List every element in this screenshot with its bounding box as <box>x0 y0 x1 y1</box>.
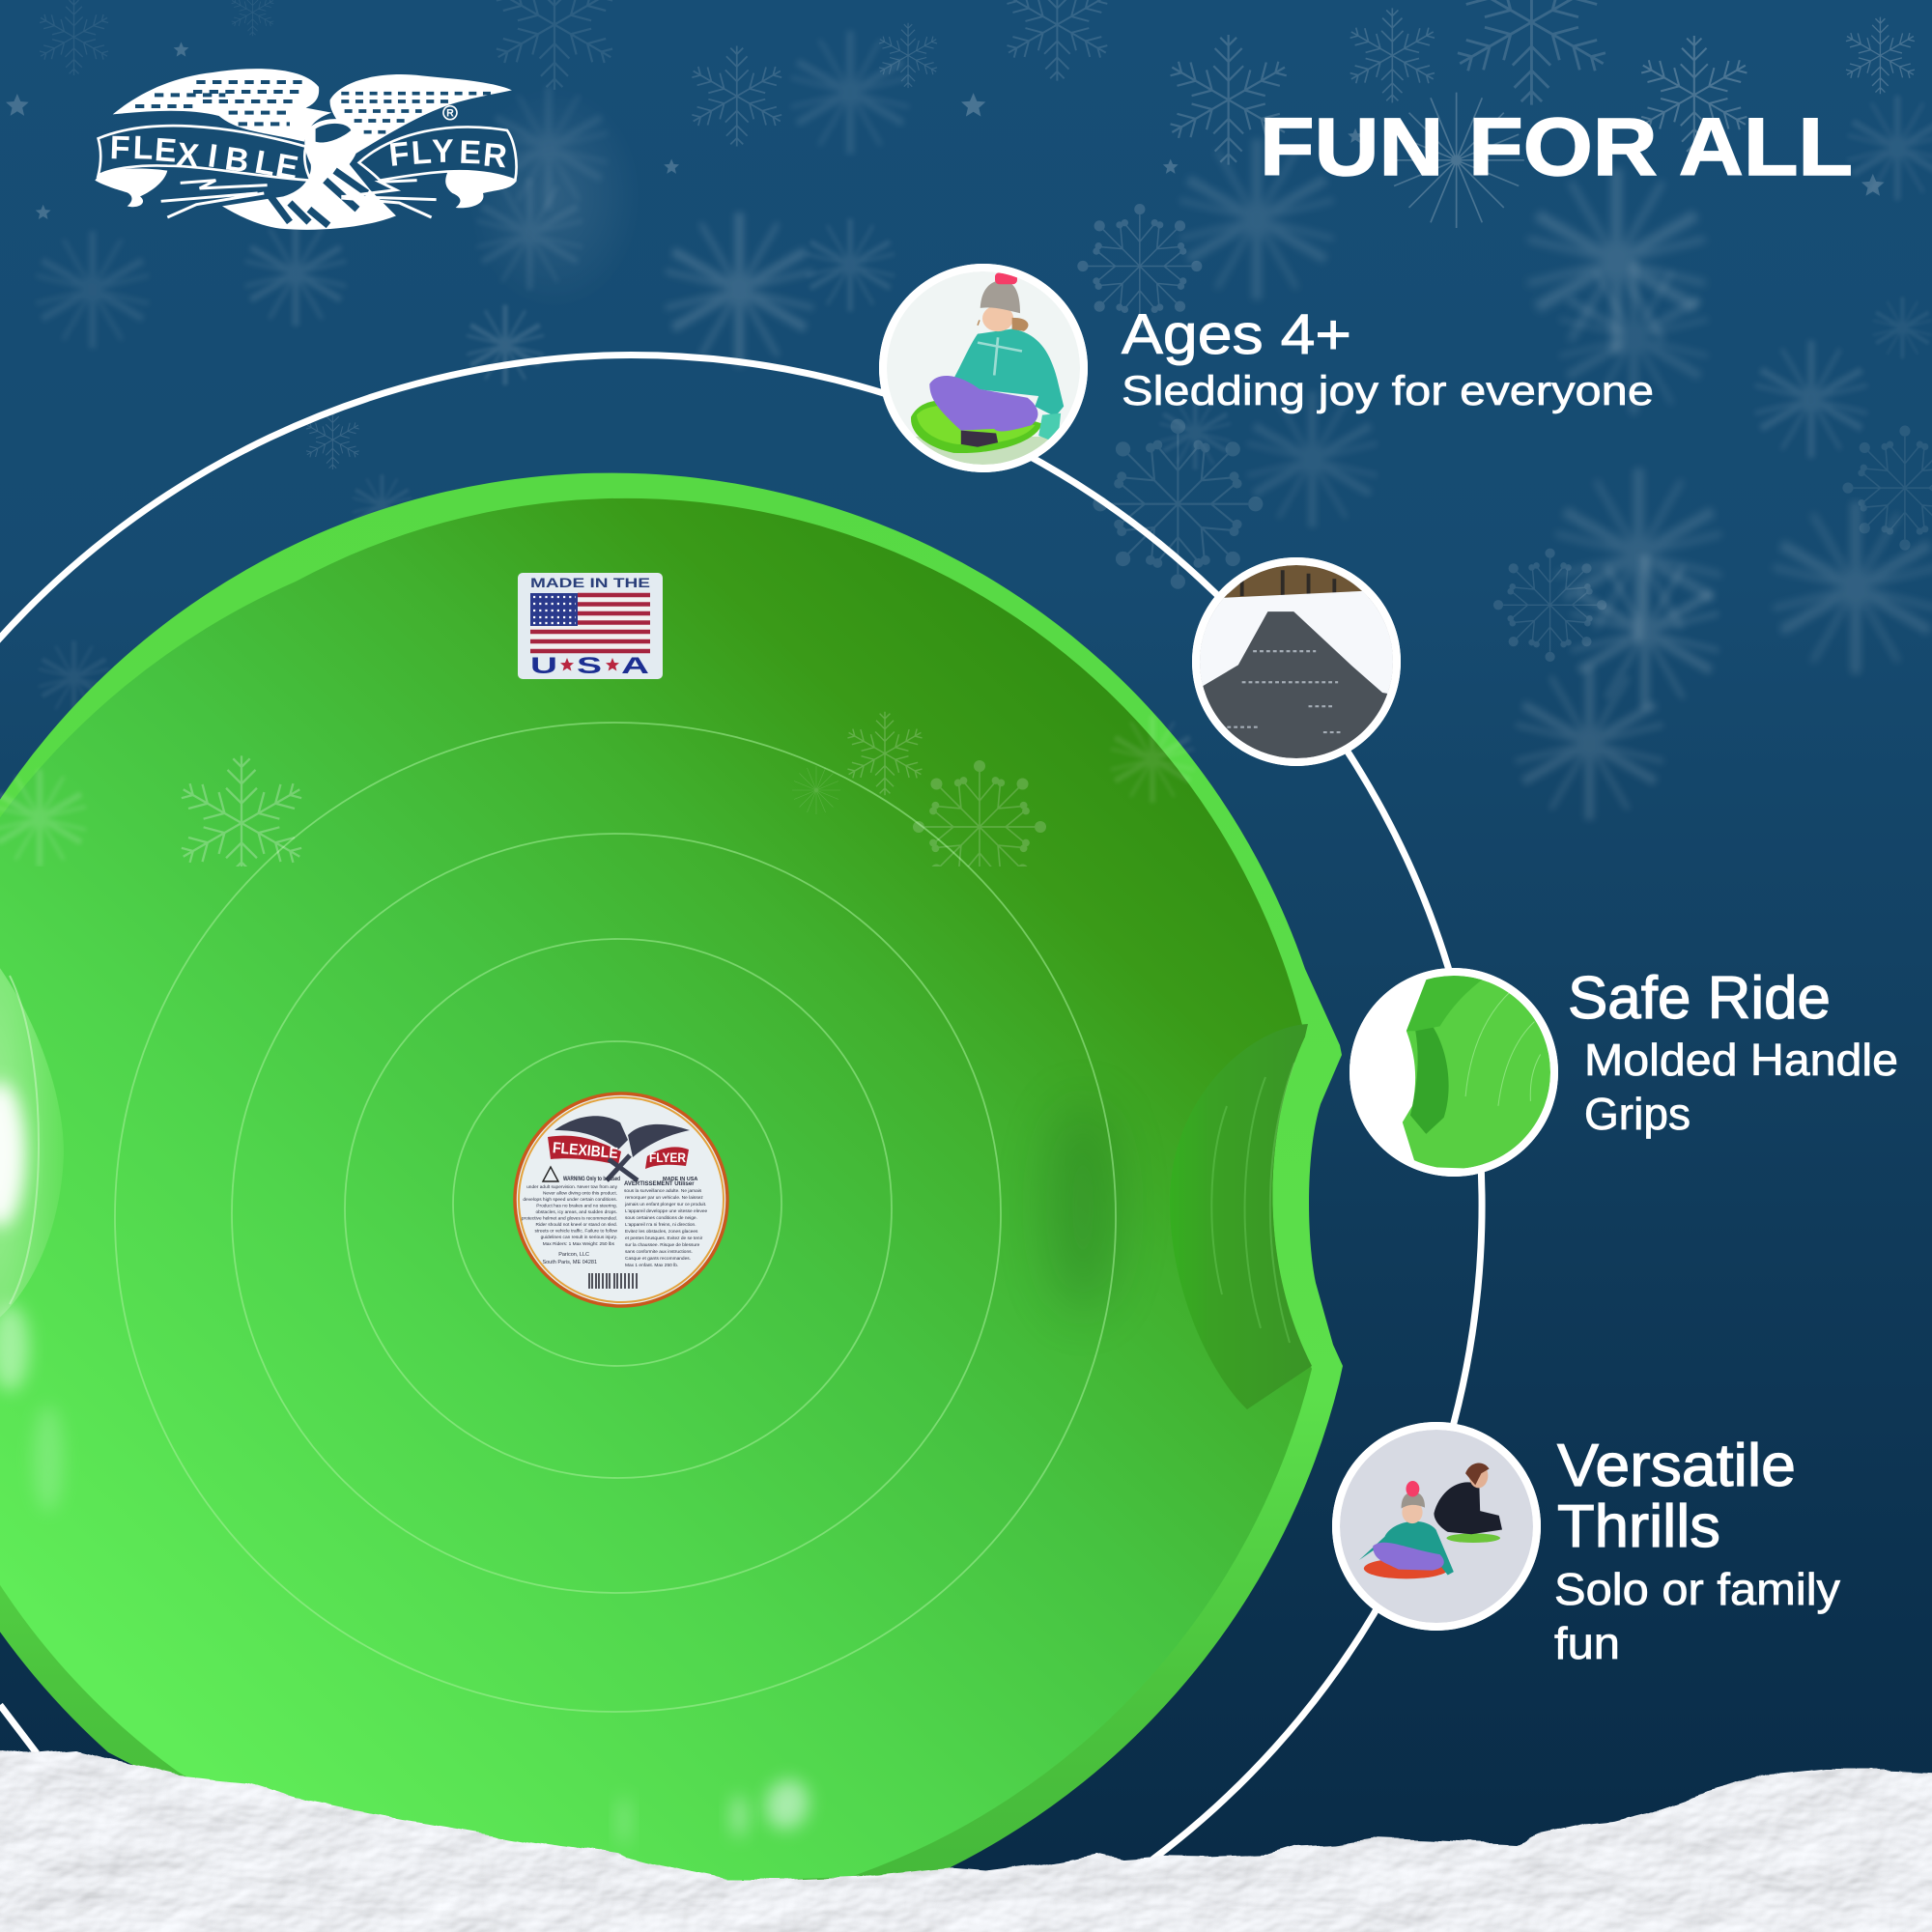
sticker USA letters: S <box>577 653 602 679</box>
label text French: L'appareil n'a ni freins, ni direction. <box>625 1222 696 1228</box>
right ribbon with FLYER: FLYER <box>387 133 508 175</box>
right handle grip recess <box>1170 1024 1312 1409</box>
label text French: sous la surveillance adulte. Ne jamais <box>624 1188 702 1194</box>
heading: FUN FOR ALL: FUN FOR ALL <box>1260 101 1853 192</box>
left ribbon with FLEXIBLE: FLEXIBLE <box>109 129 301 186</box>
label text English: South Paris, ME 04281 <box>542 1260 597 1265</box>
label text French: Casque et gants recommandes. <box>625 1256 691 1262</box>
sticker heading: MADE IN THE <box>530 575 650 590</box>
label text French: Max 1 enfant. Max 250 lb. <box>625 1263 678 1268</box>
concentric moulded rings <box>115 723 1116 1712</box>
label text French: et pentes brusques. Evitez de se tenir <box>625 1236 703 1241</box>
label text English: Never allow diving onto this product. <box>543 1190 617 1196</box>
label text English: Paricon, LLC <box>558 1252 589 1258</box>
label text French: MADE IN USA <box>663 1177 697 1182</box>
left handle cut-out <box>0 961 64 1321</box>
sled inner bowl <box>0 498 1312 1893</box>
label text French: remorquer par un vehicule. Ne laissez <box>625 1195 703 1201</box>
feature text: Versatile Thrills: Solo or family <box>1554 1564 1840 1614</box>
mini logo on label: FLYER <box>649 1150 686 1165</box>
snow drift foreground <box>0 1747 1932 1932</box>
side and bottom highlights <box>0 1304 814 1846</box>
right wing <box>330 74 512 155</box>
shadow near right handle <box>1046 1101 1120 1314</box>
face <box>982 305 1013 331</box>
snowflakes overlaid on sled <box>0 712 1194 894</box>
arrows and bolts <box>161 181 437 217</box>
feature text: Ages 4+ <box>1122 303 1654 414</box>
right ribbon with FLYER <box>359 128 517 208</box>
label text English: WARNING Only to be used <box>563 1177 620 1182</box>
sled outer rim <box>0 473 1343 1895</box>
feature text: Versatile Thrills: Thrills <box>1557 1493 1720 1560</box>
feature text: Safe Ride <box>1568 965 1898 1139</box>
feature text: Ages 4+: Sledding joy for everyone <box>1122 368 1654 414</box>
registered mark <box>443 106 457 120</box>
mini logo on label <box>548 1116 690 1180</box>
feature photo: girl on green sled <box>879 261 1092 475</box>
label text English: develops high speed under certain conditions. <box>523 1197 617 1203</box>
label text English: obstacles, icy areas, and sudden drops. <box>535 1209 617 1215</box>
feature text: Versatile Thrills: fun <box>1554 1618 1620 1668</box>
feature photo: girl and mother sledding <box>1332 1422 1541 1632</box>
background snowflakes <box>6 0 1932 820</box>
sticker USA letters <box>530 653 649 679</box>
feature text: Ages 4+: Ages 4+ <box>1122 303 1351 366</box>
label text French: sous certaines conditions de neige. <box>625 1215 697 1221</box>
green sled <box>911 400 1042 453</box>
label text French: jamais un enfant plonger sur ce produit. <box>624 1202 706 1208</box>
registered mark: R <box>446 108 454 120</box>
label text French <box>624 1177 708 1268</box>
outer white arc connecting feature circles <box>0 355 1482 1860</box>
child on orange sled <box>1364 1558 1449 1578</box>
label text English: protective helmet and gloves is recommended. <box>522 1215 617 1221</box>
green saucer sled <box>0 473 1343 1895</box>
left wing <box>113 69 331 142</box>
eagle body and shield <box>222 119 396 230</box>
label text English: under adult supervision. Never tow from any <box>526 1184 618 1190</box>
jacket <box>953 328 1064 416</box>
feature text: Versatile Thrills: Versatile <box>1557 1433 1796 1499</box>
barcode <box>589 1273 637 1289</box>
label text French: sur la chaussee. Risque de blessure <box>625 1242 700 1248</box>
feature text: Safe Ride: Grips <box>1584 1089 1690 1139</box>
feature text: Versatile Thrills <box>1554 1433 1840 1668</box>
purple snow pants <box>929 376 1037 432</box>
mini logo on label: FLEXIBLE <box>552 1140 619 1162</box>
sticker USA letters: A <box>621 653 649 679</box>
asphalt speckle <box>1227 651 1342 732</box>
label text French: sans conformite aux instructions. <box>625 1249 693 1255</box>
label text English: Rider should not kneel or stand on sled. <box>535 1222 617 1228</box>
label text English: Max Riders: 1 Max Weight: 250 lbs <box>543 1241 615 1247</box>
sticker USA letters: U <box>530 653 557 679</box>
snow banks <box>1198 591 1401 696</box>
centre warning label <box>515 1094 727 1306</box>
label text English <box>522 1177 620 1265</box>
label text English: streets or vehicle traffic. Failure to follow <box>535 1229 618 1235</box>
hat <box>980 280 1020 313</box>
feature text: Safe Ride: Safe Ride <box>1568 965 1831 1032</box>
label text English: Product has no brakes and no steering. <box>536 1204 617 1209</box>
feature photo: snowy path <box>1192 557 1401 766</box>
warning triangle <box>543 1167 558 1181</box>
label text French: AVERTISSEMENT Utiliser <box>624 1181 695 1187</box>
label text English: guidelines can result in serious injury. <box>541 1235 617 1240</box>
trees <box>1224 563 1364 598</box>
label text French: Evitez les obstacles, zones glacees <box>625 1229 698 1235</box>
left ribbon with FLEXIBLE <box>95 126 311 207</box>
adult on green sled <box>1446 1533 1500 1543</box>
made in the USA sticker <box>518 573 663 679</box>
feature photo: molded handle close-up <box>1350 968 1558 1177</box>
brand logo: Flexible Flyer eagle <box>95 69 517 230</box>
flag <box>530 593 650 653</box>
feature text: Safe Ride: Molded Handle <box>1584 1035 1898 1085</box>
label text French: L'appareil developpe une vitesse elevee <box>625 1208 708 1214</box>
